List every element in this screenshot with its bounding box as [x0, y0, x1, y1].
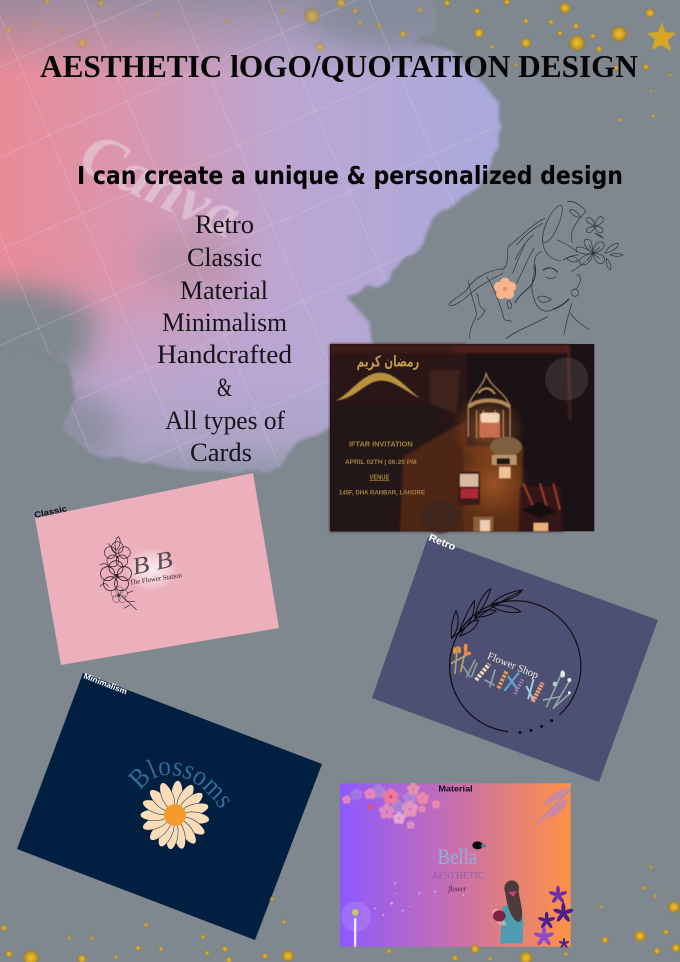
label: Minimalism: Minimalism [82, 671, 128, 696]
list of design styles: Cards [190, 438, 252, 467]
list of design styles [157, 210, 292, 467]
Arabic calligraphy: رمضان كريم [357, 353, 419, 371]
card: Material: flower [448, 883, 467, 893]
logo: Blossoms daisy: Blossoms [127, 759, 230, 808]
Canva watermark: Canva [70, 119, 251, 252]
small lantern [490, 437, 522, 457]
girl illustration [492, 880, 523, 943]
gold glitter: top [6, 0, 676, 122]
logo: floral B B [100, 537, 183, 610]
label: Classic: Classic [33, 503, 68, 520]
list of design styles: All types of [165, 406, 285, 435]
list of design styles: Material [180, 276, 268, 305]
invitation text: APRIL 02TH | 06:20 PM [345, 459, 417, 466]
logo: circle wreath [450, 589, 581, 734]
watercolour cloud with tile pattern [0, 0, 503, 474]
card: Retro [372, 533, 658, 782]
card: Material [340, 783, 574, 948]
line art: faces, hand and flowers [449, 201, 623, 338]
list of design styles: Minimalism [162, 308, 287, 337]
wildflower band [452, 644, 571, 708]
gold hill [336, 373, 420, 401]
invitation text: IFTAR INVITATION [349, 439, 413, 448]
list of design styles: Handcrafted [157, 340, 292, 369]
invitation text: VENUE [369, 474, 390, 481]
subtitle: I can create a unique & personalized design [77, 161, 623, 190]
list of design styles: Classic [187, 243, 262, 272]
card: Minimalism [17, 671, 322, 940]
logo: floral B B: B B [130, 547, 175, 581]
pink blossoms [342, 783, 440, 829]
lens flare [545, 357, 588, 401]
red lantern [458, 472, 480, 505]
icon: peach flower [494, 277, 516, 299]
title: AESTHETIC lOGO/QUOTATION DESIGN [40, 48, 638, 84]
list of design styles: & [217, 373, 232, 402]
purple flowers [533, 885, 574, 948]
card: Material: AESTHETIC [432, 871, 484, 881]
list of design styles: Retro [195, 210, 254, 239]
card: Classic [33, 473, 279, 665]
invitation text [339, 439, 425, 496]
invitation text: 145F, DHA RAHBAR, LAHORE [339, 489, 425, 496]
Iftar invitation card [330, 344, 594, 533]
warm wall shading [330, 344, 570, 533]
logo: circle wreath: Flower Shop [486, 651, 540, 681]
logo: floral B B: The Flower Station [129, 571, 183, 587]
bird [472, 841, 487, 849]
large lantern [468, 373, 510, 438]
label: Retro: Retro [427, 533, 457, 553]
gold glitter: bottom and right [1, 865, 680, 962]
leaf branch [536, 788, 571, 825]
dandelion [341, 882, 464, 947]
logo: Blossoms daisy [127, 759, 230, 850]
Bella wordmark: Bella [437, 844, 478, 869]
label: Material: Material [438, 784, 473, 794]
